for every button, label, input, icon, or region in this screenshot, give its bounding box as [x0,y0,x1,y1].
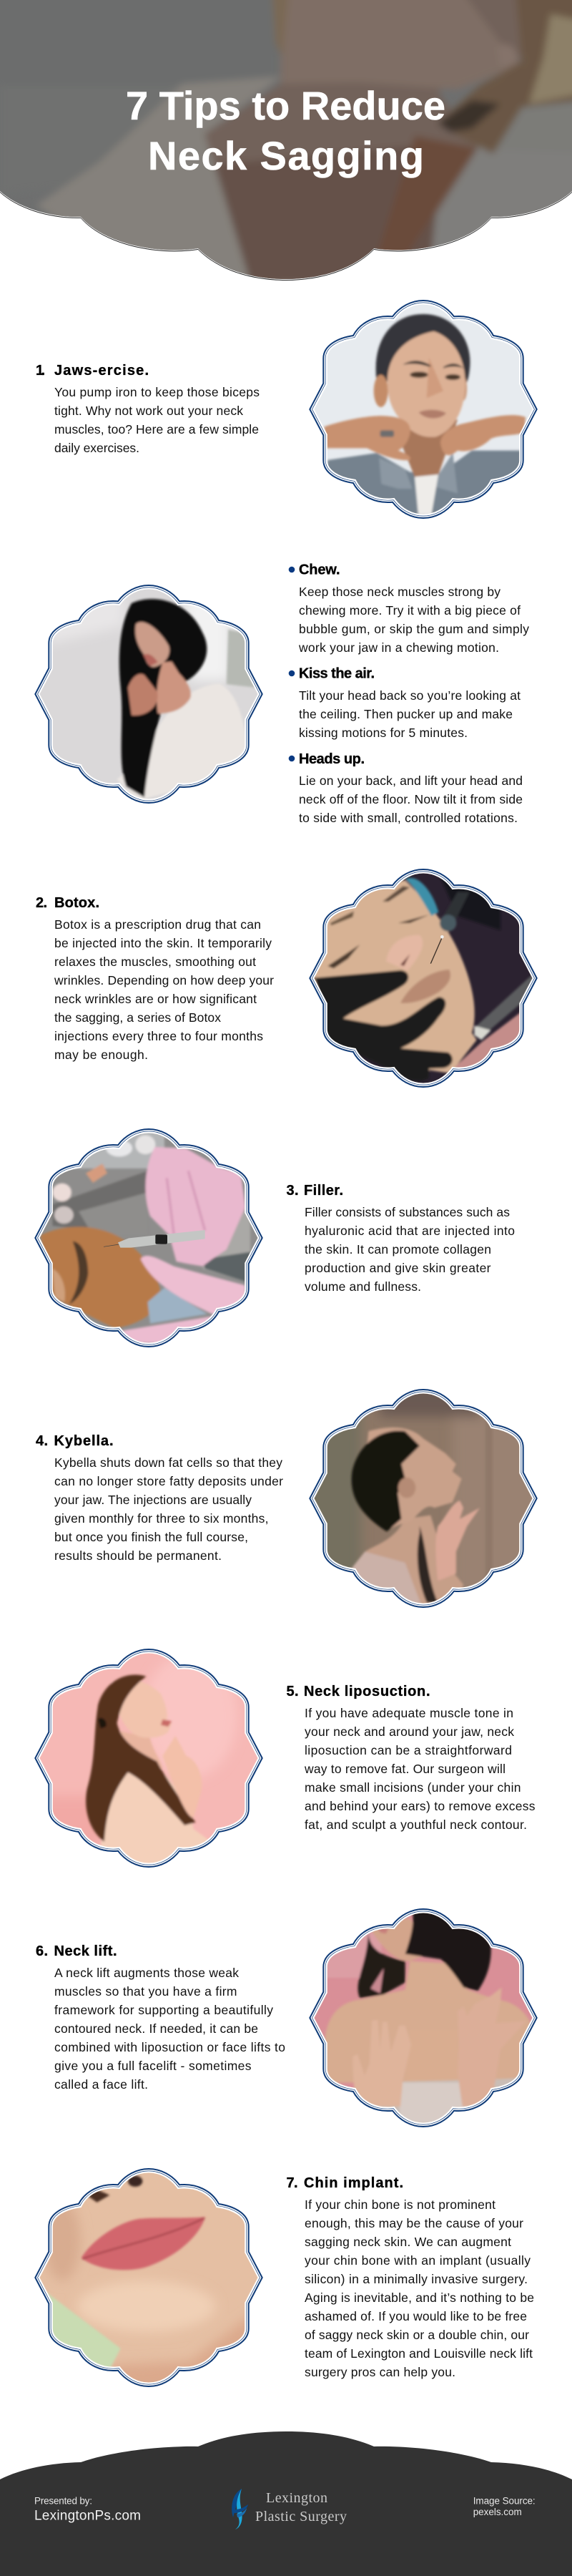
body text: tight. Why not work out your neck [54,404,243,418]
body text: may be enough. [54,1048,148,1062]
header white gap [0,172,572,280]
body text: wrinkles. Depending on how deep your [54,973,274,987]
heading: 1. [36,363,45,379]
body text [54,385,260,455]
body text: Botox is a prescription drug that can [54,917,261,932]
photo: woman with long dark hair touching neck [34,585,263,804]
bullet [289,567,295,572]
sub-tip: kiss the air: Tilt your head back so you’re looking at [299,688,521,703]
sub-tip: heads up: to side with small, controlled rotations. [299,811,518,825]
body text: enough, this may be the cause of your [305,2216,523,2230]
heading: Kybella. [54,1433,113,1449]
heading: 3. [286,1183,299,1199]
photo: woman in profile touching chin [309,1389,538,1608]
heading: Neck lift. [54,1943,117,1959]
heading: 6. [36,1943,48,1959]
body text: of saggy neck skin or a double chin, our [305,2328,529,2342]
logo icon [232,2489,248,2529]
sub-tip: heads up: Lie on your back, and lift your head and [299,774,523,788]
title: 7 Tips to Reduce [126,83,445,128]
body text [54,1455,283,1563]
photo: injection with black gloves [305,866,543,1093]
logo wordmark [255,2490,347,2524]
heading: Chin implant. [304,2175,403,2191]
photo: bare shoulders and hands [305,1904,543,2130]
body text: ashamed of. If you would like to be free [305,2309,527,2323]
body text: team of Lexington and Louisville neck lift [305,2346,533,2361]
sub-tip: chew [289,562,529,655]
body text: surgery pros can help you. [305,2365,455,2379]
heading: 2. [36,895,47,911]
footer background [0,2431,572,2576]
photo: close-up of lips and chin [34,2168,263,2387]
body text: combined with liposuction or face lifts to [54,2040,285,2054]
header scallop edge line [0,172,572,280]
sub-tip: heads up: neck off of the floor. Now tilt it from side [299,792,523,806]
panel: 2. Botox [36,866,543,1093]
heading: 4. [36,1433,48,1449]
body text: liposuction can be a straightforward [305,1743,512,1757]
presented by [34,2496,141,2523]
body text: way to remove fat. Our surgeon will [304,1762,506,1776]
body text: results should be permanent. [54,1548,222,1563]
body text: can no longer store fatty deposits under [54,1474,283,1488]
body text: framework for supporting a beautifully [54,2003,273,2017]
body text: relaxes the muscles, smoothing out [54,955,256,969]
sub-tip: kiss the air: the ceiling. Then pucker up and make [299,707,513,721]
body text: neck wrinkles are or how significant [54,992,257,1006]
body text: contoured neck. If needed, it can be [54,2021,258,2036]
heading: Jaws-ercise. [54,363,149,379]
body text: daily exercises. [54,441,139,455]
panel: 1. Jaws-ercise [36,296,543,522]
presented by: Presented by: [34,2496,92,2506]
logo wordmark: Lexington [266,2490,327,2506]
body text: You pump iron to keep those biceps [54,385,260,399]
body text: your neck and around your jaw, neck [305,1724,514,1739]
footer panel [0,2431,572,2576]
body text: your jaw. The injections are usually [54,1493,252,1507]
body text: If you have adequate muscle tone in [305,1706,513,1720]
sub-tip: chew: Keep those neck muscles strong by [299,585,500,599]
panel: 5. Neck liposuction [34,1649,535,1868]
image source [473,2496,536,2517]
header panel [0,0,572,293]
sub-tip: kiss the air: Kiss the air. [299,665,375,681]
body text [305,1205,515,1294]
sub-tip: heads up [289,751,523,825]
image source: pexels.com [473,2507,522,2517]
panel: 7. Chin implant [29,2164,534,2398]
panel: jaw exercises [29,562,529,825]
body text: be injected into the skin. It temporarily [54,936,272,950]
body text: called a face lift. [54,2077,148,2092]
body text: fat, and sculpt a youthful neck contour. [305,1818,527,1832]
body text [304,1706,536,1832]
sub-tip: chew: chewing more. Try it with a big piece of [299,603,521,618]
sub-tip: chew: work your jaw in a chewing motion. [298,640,499,655]
sub-tip: chew: bubble gum, or skip the gum and simply [299,622,529,636]
panel: 4. Kybella [36,1389,538,1608]
header photo: neck and shoulders, darkened [0,0,572,293]
title [126,83,445,178]
body text: injections every three to four months [54,1029,263,1043]
heading: Filler. [304,1183,343,1199]
body text: production and give skin greater [305,1261,491,1275]
sub-tip: kiss the air [289,665,521,740]
body text: muscles, too? Here are a few simple [54,422,259,436]
sub-tip: chew: Chew. [299,562,340,578]
body text: hyaluronic acid that are injected into [305,1224,515,1238]
body text: Aging is inevitable, and it’s nothing to be [305,2290,534,2305]
photo: syringe and pink gloves [31,1126,270,1352]
body text [305,2197,534,2379]
body text: A neck lift augments those weak [54,1966,239,1980]
body text: volume and fullness. [305,1279,421,1294]
body text: given monthly for three to six months, [54,1511,269,1526]
body text [54,917,274,1062]
body text: If your chin bone is not prominent [305,2197,495,2212]
panel: 6. Neck lift [36,1904,543,2130]
sub-tip: kiss the air: kissing motions for 5 minutes. [299,726,468,740]
body text: the sagging, a series of Botox [54,1010,221,1025]
heading [286,1183,343,1199]
heading: Neck liposuction. [304,1684,430,1699]
body text: sagging neck skin. We can augment [305,2235,511,2249]
bullet [289,756,295,761]
image source: Image Source: [473,2496,536,2506]
body text: Filler consists of substances such as [305,1205,510,1219]
body text: Kybella shuts down fat cells so that they [54,1455,282,1470]
body text: but once you finish the full course, [54,1530,248,1544]
bullet [289,670,295,676]
presented by: LexingtonPs.com [34,2509,141,2523]
body text: and behind your ears) to remove excess [305,1799,536,1813]
body text: the skin. It can promote collagen [305,1242,491,1257]
body text: your chin bone with an implant (usually [305,2253,531,2268]
body text: muscles so that you have a firm [54,1984,237,1999]
body text [54,1966,285,2092]
body text: give you a full facelift - sometimes [54,2059,252,2073]
photo: woman on pink background [34,1649,263,1868]
title: Neck Sagging [148,133,424,178]
heading: 7. [286,2175,297,2191]
body text: make small incisions (under your chin [305,1780,521,1795]
panel: 3. Filler [31,1126,515,1352]
body text: silicon) in a minimally invasive surgery. [305,2272,528,2286]
sub-tip: heads up: Heads up. [299,751,365,767]
logo wordmark: Plastic Surgery [255,2509,347,2524]
heading: 5. [286,1684,299,1699]
photo: woman pressing fists under jaw [305,296,543,522]
heading: Botox. [54,895,99,911]
